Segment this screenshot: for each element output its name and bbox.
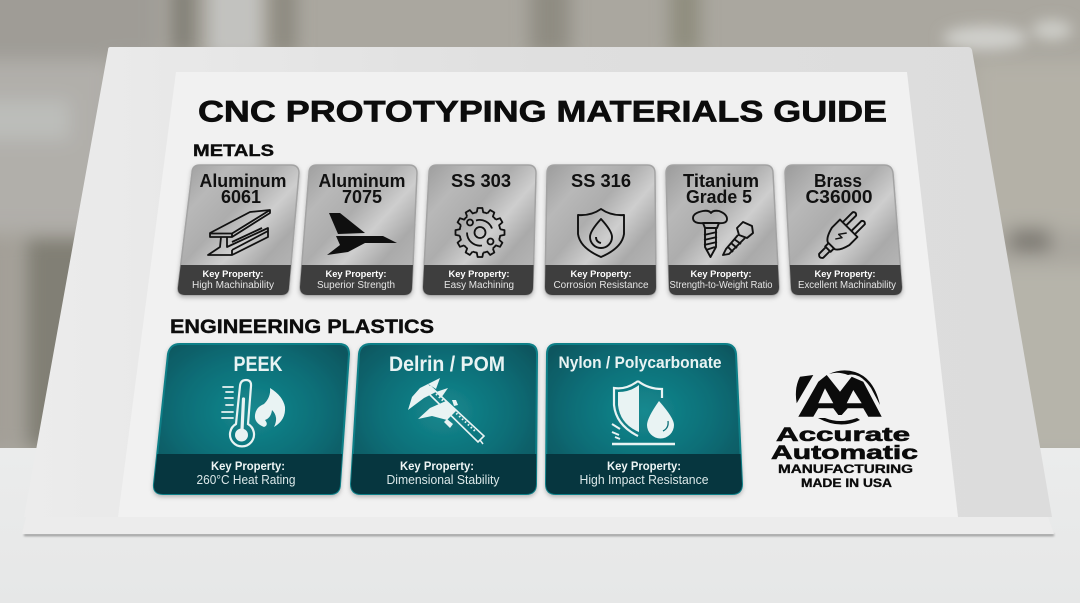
logo: Accurate Automatic: Accurate xyxy=(776,425,910,446)
card: Aluminum 6061: Aluminum xyxy=(200,171,286,191)
card: PEEK: 260°C Heat Rating xyxy=(196,473,296,487)
heading: metals: METALS xyxy=(193,141,274,160)
card: Nylon / Polycarbonate xyxy=(540,344,745,496)
icon: shield, droplet and impact xyxy=(612,381,675,444)
card: Titanium Grade 5: Strength-to-Weight Ratio xyxy=(670,280,773,291)
card: Aluminum 6061: 6061 xyxy=(221,187,261,207)
logo: Accurate Automatic: Automatic xyxy=(771,443,919,464)
card: Brass C36000: Excellent Machinability xyxy=(798,280,896,291)
icon: electric plug xyxy=(811,208,869,266)
card: Titanium Grade 5: Grade 5 xyxy=(686,187,752,207)
card: Aluminum 6061 xyxy=(170,165,300,297)
card: PEEK: PEEK xyxy=(234,353,282,376)
icon: thermometer and flame xyxy=(222,380,285,446)
icon: caliper xyxy=(408,378,484,444)
heading: engineering plastics: ENGINEERING PLASTICS xyxy=(170,317,434,338)
logo: Accurate Automatic: MADE IN USA xyxy=(801,478,892,490)
blurred background xyxy=(0,0,1080,455)
card: SS 316: Corrosion Resistance xyxy=(554,280,649,291)
card: Brass C36000: Key Property: xyxy=(814,269,876,280)
card: Titanium Grade 5: Key Property: xyxy=(690,269,752,280)
icon: I-beam xyxy=(208,210,270,255)
card: Nylon / Polycarbonate: High Impact Resistance xyxy=(580,473,709,487)
icon: dental implant and bolt xyxy=(693,211,753,257)
icon: shield with droplet xyxy=(578,209,624,257)
card: SS 316: Key Property: xyxy=(570,269,632,280)
card: Nylon / Polycarbonate: Nylon / Polycarbonate xyxy=(558,353,722,372)
icon: aircraft wing xyxy=(327,213,397,255)
card: Aluminum 7075: Key Property: xyxy=(326,269,386,280)
title: CNC PROTOTYPING MATERIALS GUIDE xyxy=(198,96,887,128)
card: Delrin / POM: Key Property: xyxy=(400,459,474,473)
card: SS 316 xyxy=(540,165,660,297)
card: Delrin / POM: Dimensional Stability xyxy=(386,473,500,487)
table surface xyxy=(0,448,1080,603)
card: Titanium Grade 5 xyxy=(660,165,785,297)
logo: Accurate Automatic xyxy=(771,370,919,490)
card: Aluminum 6061: Key Property: xyxy=(202,269,264,280)
card: Delrin / POM xyxy=(345,344,540,496)
card: Aluminum 7075 xyxy=(295,165,420,297)
card: Delrin / POM: Delrin / POM xyxy=(389,353,505,376)
card: Aluminum 7075: Aluminum xyxy=(318,171,406,191)
card: Nylon / Polycarbonate: Key Property: xyxy=(607,459,681,473)
card: Brass C36000 xyxy=(780,165,905,297)
display stand xyxy=(22,47,1054,536)
card: SS 303: Key Property: xyxy=(448,269,510,280)
card: SS 303: SS 303 xyxy=(451,171,511,191)
card: Aluminum 7075: 7075 xyxy=(342,187,382,207)
card: Brass C36000: C36000 xyxy=(806,187,872,207)
card: PEEK xyxy=(150,344,349,496)
card: SS 303 xyxy=(420,165,540,297)
card: PEEK: Key Property: xyxy=(211,459,285,473)
poster panel xyxy=(118,72,958,517)
icon: AA emblem xyxy=(796,370,882,425)
card: SS 316: SS 316 xyxy=(571,171,631,191)
logo: Accurate Automatic: MANUFACTURING xyxy=(778,464,913,476)
card: SS 303: Easy Machining xyxy=(444,280,514,291)
card: Brass C36000: Brass xyxy=(814,171,862,191)
card: Titanium Grade 5: Titanium xyxy=(683,171,759,191)
icon: gear xyxy=(455,208,505,257)
card: Aluminum 7075: Superior Strength xyxy=(317,280,395,291)
card: Aluminum 6061: High Machinability xyxy=(192,280,274,291)
